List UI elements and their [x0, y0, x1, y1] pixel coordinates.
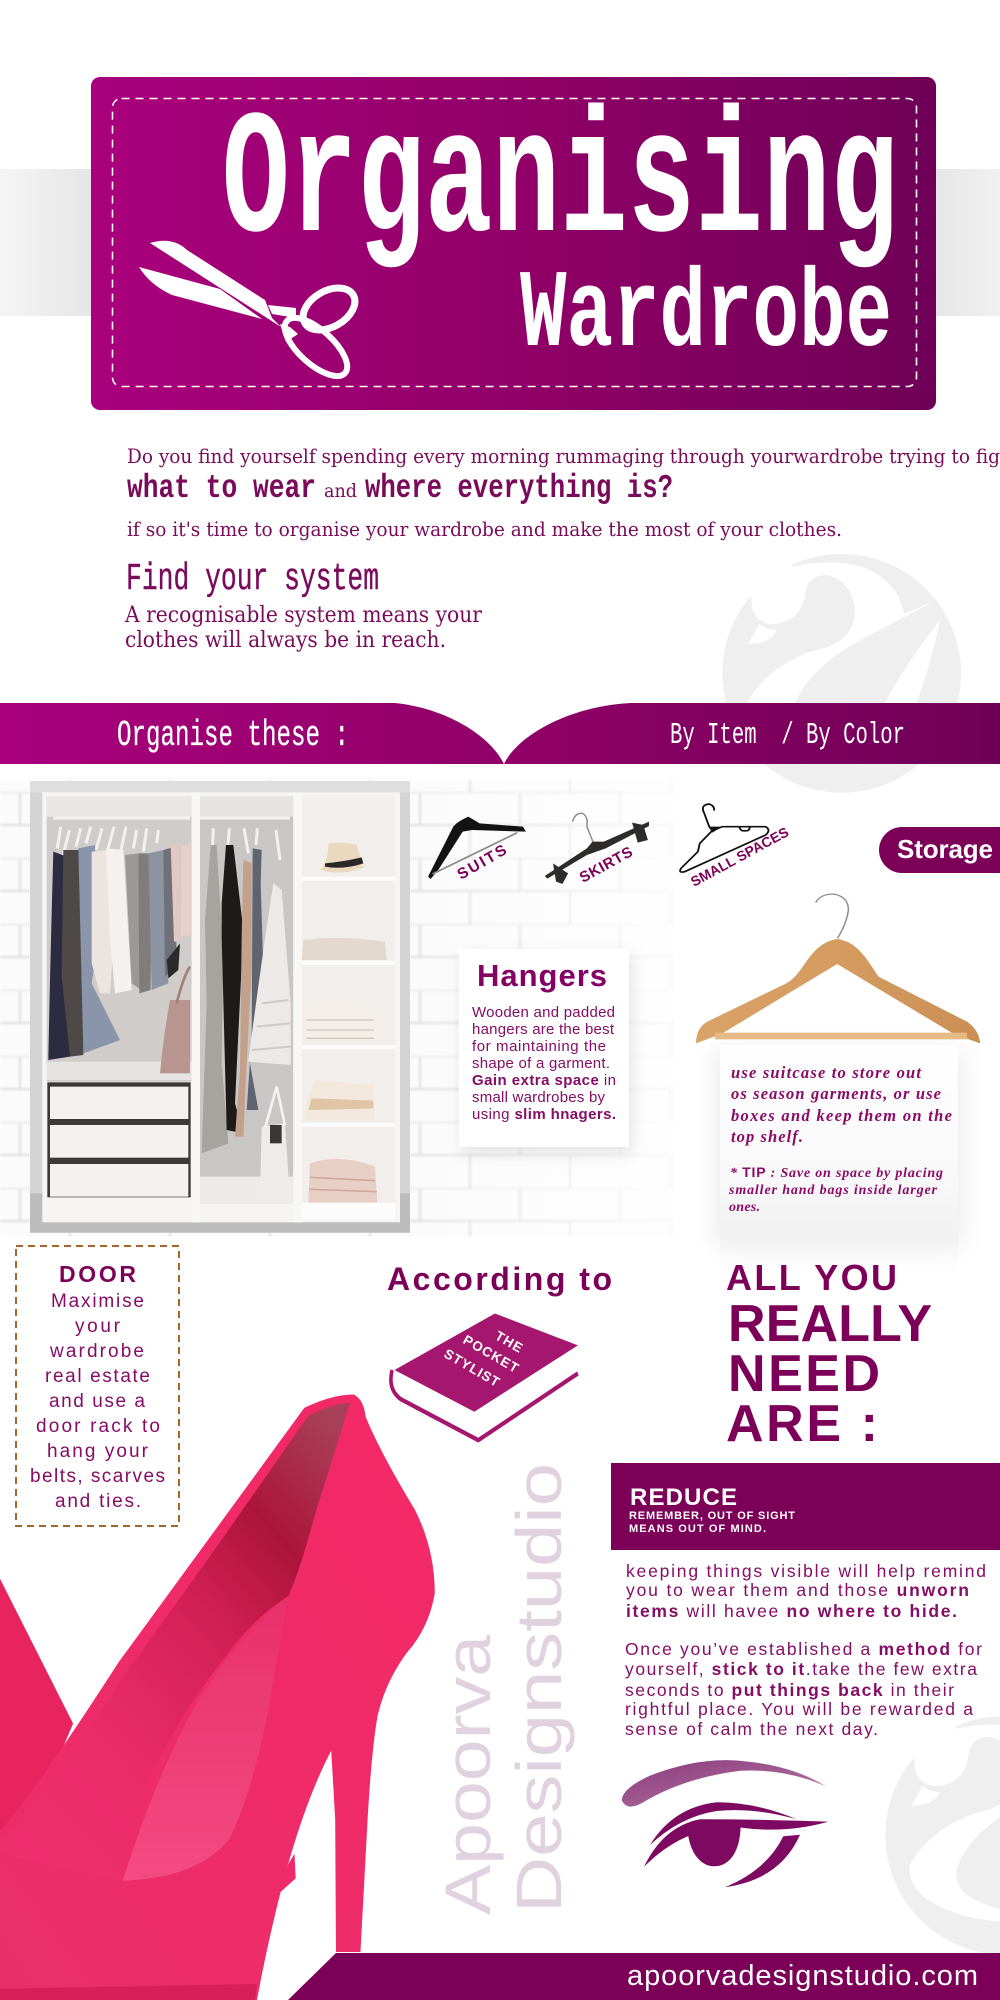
heading: door: DOOR: [59, 1261, 136, 1287]
text: reduce body: items will havee no where to hide.: [626, 1601, 957, 1621]
text: reduce body: you to wear them and those unworn: [626, 1580, 969, 1600]
text: hangers body: Gain extra space in: [472, 1072, 616, 1089]
heading: all you really need are: ALL YOU: [726, 1257, 897, 1298]
text: door body: real estate: [45, 1366, 150, 1387]
panel: reduce: MEANS OUT OF MIND.: [629, 1523, 766, 1535]
panel: reduce: REDUCE: [630, 1484, 737, 1511]
panel: reduce: REMEMBER, OUT OF SIGHT: [629, 1510, 795, 1522]
panel: hangers: [459, 949, 632, 1153]
icon: eye: [622, 1760, 828, 1887]
text: hangers body: for maintaining the: [472, 1038, 606, 1055]
heading: what to wear and where everything is: [127, 470, 673, 507]
text: find your system body: [124, 603, 482, 653]
text: storage body: boxes and keep them on the: [731, 1106, 952, 1125]
text: door body: hang your: [47, 1441, 149, 1462]
heading: find your system: Find your system: [126, 558, 379, 601]
text: storage tip: * TIP : Save on space by placing: [730, 1164, 943, 1181]
hanging clothes middle: [202, 845, 228, 1153]
panel: title banner: [91, 77, 936, 410]
label: suits: SUITS: [454, 842, 510, 883]
intro text: if so it's time to organise your wardrobe and make the most of your clothes.: [127, 517, 842, 541]
text: find your system body: clothes will always be in reach.: [125, 628, 446, 653]
hanging clothes left: [48, 852, 70, 1060]
text: find your system body: A recognisable system means your: [124, 603, 482, 628]
icon: book: POCKET: [461, 1332, 522, 1376]
text: hangers body: Wooden and padded: [472, 1004, 615, 1021]
watermark logo bottom: [885, 1716, 1000, 1955]
icon: skirts hanger: [545, 813, 649, 884]
heading: all you really need are: REALLY: [728, 1295, 932, 1353]
text: door body: [30, 1291, 165, 1512]
text: storage body: [731, 1063, 952, 1146]
text: hangers body: hangers are the best: [472, 1021, 615, 1038]
panel: storage card: [696, 894, 980, 1280]
vertical text: Apoorva Designstudio: Apoorva: [432, 1635, 504, 1915]
image: pink high heel shoe: [0, 1395, 435, 2000]
hat: [320, 843, 363, 873]
heading: organise these: Organise these :: [117, 715, 349, 756]
vertical text: Apoorva Designstudio: Designstudio: [503, 1463, 575, 1913]
text: door body: wardrobe: [49, 1341, 144, 1362]
icon: suits hanger: [428, 817, 526, 879]
panel: door: [16, 1246, 179, 1526]
text: door body: Maximise: [51, 1291, 144, 1312]
text: reduce body: yourself, stick to it.take the few extra: [625, 1659, 977, 1679]
text: door body: and ties.: [55, 1491, 141, 1512]
text: reduce body: rightful place. You will be rewarded a: [625, 1699, 973, 1719]
text: storage body: top shelf.: [731, 1127, 803, 1146]
text: hangers body: using slim hnagers.: [472, 1106, 616, 1123]
intro text: [127, 444, 1000, 541]
text: storage tip: smaller hand bags inside larger: [728, 1183, 938, 1198]
brick wall background: [0, 780, 672, 1243]
text: reduce body: sense of calm the next day.: [625, 1719, 878, 1739]
heading: hangers: Hangers: [477, 958, 607, 993]
text: storage body: os season garments, or use: [731, 1084, 941, 1103]
text: door body: and use a: [49, 1391, 145, 1412]
label: skirts: SKIRTS: [577, 844, 636, 886]
heading: according to: According to: [387, 1261, 612, 1297]
text: reduce body: seconds to put things back in their: [625, 1680, 954, 1700]
heading: all you really need are: ARE :: [726, 1395, 878, 1453]
text: reduce body: keeping things visible will help remind: [626, 1561, 986, 1581]
text: reduce body: Once you’ve established a method for: [625, 1639, 982, 1659]
icon: book: THE: [493, 1328, 526, 1356]
text: reduce body: [625, 1561, 986, 1739]
folded piles: [302, 938, 387, 960]
icon: wooden hanger: [696, 894, 980, 1043]
text: storage tip: [728, 1164, 943, 1215]
background band behind header: [0, 169, 1000, 316]
icon: book: STYLIST: [441, 1346, 503, 1390]
heading: what to wear and where everything is: and: [324, 480, 357, 502]
icon: book: [391, 1313, 578, 1440]
text: door body: door rack to: [36, 1416, 160, 1437]
pill: storage: [879, 827, 1000, 873]
footer band: apoorvadesignstudio.com: [627, 1960, 978, 1992]
panel: reduce: [611, 1463, 1000, 1550]
footer band: [288, 1953, 1000, 2000]
heading: all you really need are: [726, 1257, 932, 1453]
label: small spaces: SMALL SPACES: [688, 824, 791, 890]
shelves: [302, 877, 395, 1219]
text: storage tip: ones.: [729, 1200, 760, 1215]
panel: section band: [0, 703, 1000, 764]
heading: all you really need are: NEED: [728, 1345, 880, 1403]
heading: what to wear and where everything is: where everything is?: [365, 470, 673, 507]
watermark logo top: [722, 554, 961, 793]
bag tan: [160, 1000, 190, 1073]
rails and hangers: [53, 818, 290, 860]
text: door body: belts, scarves: [30, 1466, 165, 1487]
vertical text: Apoorva Designstudio: [432, 1463, 575, 1915]
icon: scissors: [139, 241, 362, 386]
pill: storage: Storage: [897, 834, 993, 864]
photo: wardrobe: [30, 781, 410, 1233]
heading: what to wear and where everything is: what to wear: [127, 470, 316, 507]
tote white: [260, 1123, 290, 1198]
drawers: [47, 1082, 191, 1197]
icon: small spaces hanger: [680, 804, 768, 872]
text: hangers body: [472, 1004, 616, 1123]
text: hangers body: small wardrobes by: [472, 1089, 606, 1106]
text: door body: your: [75, 1316, 121, 1337]
text: hangers body: shape of a garment.: [472, 1055, 610, 1072]
text: storage body: use suitcase to store out: [731, 1063, 921, 1082]
